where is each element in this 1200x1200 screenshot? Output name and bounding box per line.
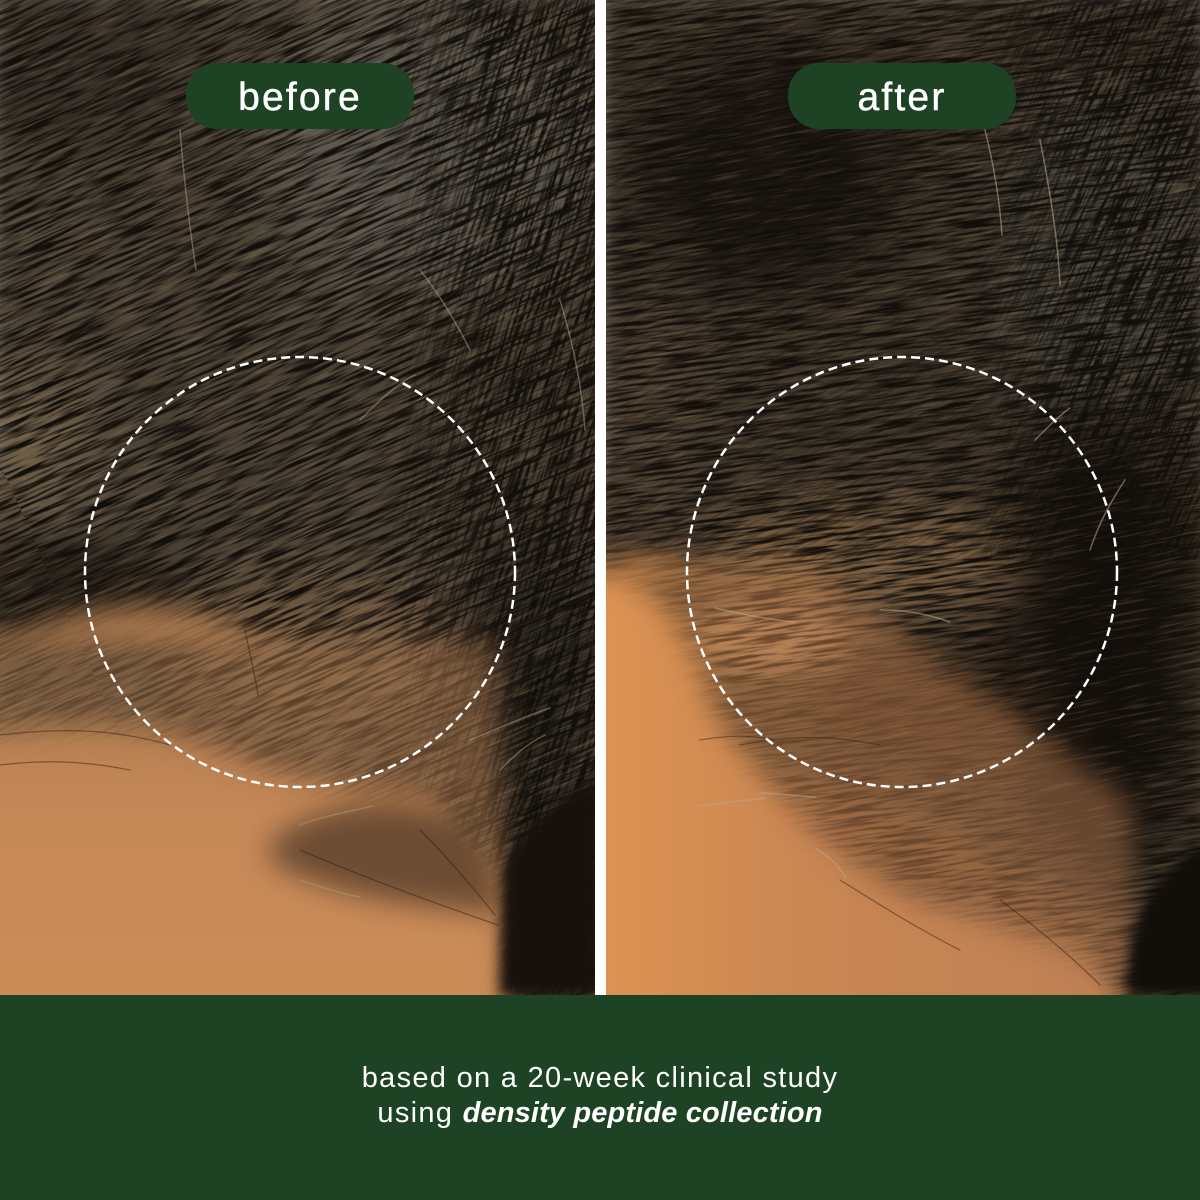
caption: using density peptide collection — [377, 1097, 823, 1129]
footer band — [0, 995, 1200, 1200]
loose strands: after — [700, 130, 1125, 878]
caption — [362, 1062, 838, 1129]
skin: after — [606, 480, 1200, 995]
photo: before — [0, 0, 600, 995]
hair mass: after — [595, 0, 1200, 995]
dashed circle: before — [85, 357, 515, 787]
label: before — [186, 63, 414, 129]
skin: before — [0, 480, 595, 995]
label: after: after — [857, 76, 947, 119]
loose strands: before — [180, 130, 585, 897]
label: before: before — [238, 76, 362, 119]
dark hair behind ear: before — [500, 780, 600, 995]
photo: after — [595, 0, 1200, 995]
dark hair behind ear: after — [1128, 840, 1200, 995]
hair mass: before — [0, 0, 600, 995]
sparse hair patch: before — [270, 804, 502, 915]
label: after — [788, 63, 1016, 129]
dashed circle: after — [687, 357, 1117, 787]
caption: based on a 20-week clinical study — [362, 1062, 838, 1094]
